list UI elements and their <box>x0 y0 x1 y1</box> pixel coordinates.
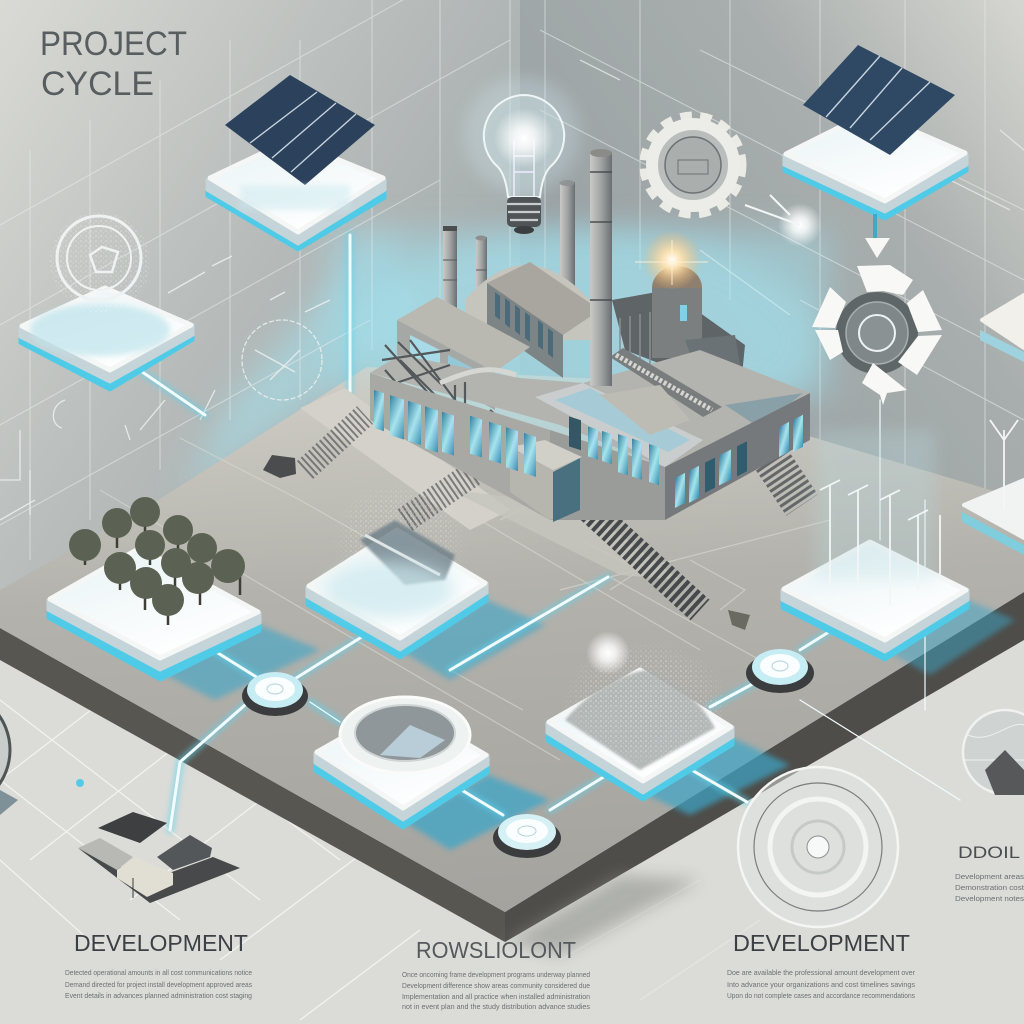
factory <box>360 149 820 523</box>
lens ring <box>340 697 470 773</box>
sphere icon right <box>963 710 1024 795</box>
caption: centre: ROWSLIOLONT <box>416 937 576 963</box>
factory glow <box>360 230 820 450</box>
caption: right edge <box>955 843 1024 903</box>
node three <box>493 814 561 858</box>
main roof <box>370 350 810 467</box>
chip stack <box>78 812 240 903</box>
caption: right edge: Development areas <box>955 874 1024 881</box>
node one <box>242 672 308 716</box>
caption: development left: Demand directed for project install development approved areas <box>65 980 252 989</box>
right edge tile upper <box>980 295 1024 362</box>
wind turbine tile <box>782 420 1018 660</box>
large lens icon <box>738 767 898 927</box>
caption: development right: Into advance your organizations and cost timelines savings <box>727 980 915 989</box>
small vehicle <box>263 455 750 630</box>
caption: development right: Upon do not complete cases and accordance recommendations <box>727 991 915 1000</box>
flare right <box>745 195 822 247</box>
tile glow shadows <box>160 600 1015 850</box>
left face <box>370 373 550 520</box>
cyan dot <box>76 779 84 787</box>
center tile <box>307 480 487 658</box>
small chimneys <box>443 180 575 326</box>
mound tile <box>547 631 733 800</box>
solar panel <box>803 45 955 155</box>
trees <box>69 497 245 625</box>
caption: centre: not in event plan and the study distribution advance studies <box>402 1002 590 1011</box>
left tile with circle icon <box>20 212 193 390</box>
caption: right edge: Development notes <box>955 896 1024 903</box>
ground floor tiles <box>0 650 760 1020</box>
turbines <box>820 420 1018 605</box>
caption: centre: Once oncoming frame development programs underway planned <box>402 970 590 979</box>
caption: right edge: DDOIL <box>958 843 1020 862</box>
caption: right edge: Demonstration cost <box>955 885 1024 892</box>
back building <box>465 265 590 340</box>
caption: development right: DEVELOPMENT <box>733 930 910 956</box>
connector lines <box>135 235 960 830</box>
windows: right face <box>675 413 803 512</box>
node two <box>746 649 814 693</box>
caption: development left: Event details in advances planned administration cost staging <box>65 991 252 1000</box>
right cycle icon <box>812 265 942 405</box>
tree tile <box>48 497 260 680</box>
gear <box>646 118 740 212</box>
caption: development right <box>727 930 915 1000</box>
caption: development left <box>65 930 252 1000</box>
caption: centre <box>402 937 590 1011</box>
wall sketches <box>0 60 1024 520</box>
top right tile with solar panel <box>784 45 967 219</box>
caption: development right: Doe are available the professional amount development over <box>727 968 915 977</box>
arrow down <box>865 214 890 258</box>
caption: centre: Development difference show areas community considered due <box>402 981 590 990</box>
big chimney <box>590 149 612 386</box>
main platform <box>0 367 1024 955</box>
network nodes <box>242 649 814 858</box>
lens tile <box>315 697 488 828</box>
caption: development left: DEVELOPMENT <box>74 930 248 956</box>
windows: left face <box>374 354 659 523</box>
title: CYCLE <box>41 65 154 103</box>
solar panel <box>225 75 375 185</box>
caption: centre: Implementation and all practice when installed administration <box>402 992 590 1001</box>
dark machinery gap and dome <box>612 290 745 395</box>
title: PROJECT <box>40 25 187 63</box>
left ring icon <box>0 690 18 815</box>
stairs and plaza <box>300 388 802 610</box>
light bulb <box>464 77 580 234</box>
machinery on roof <box>382 340 530 450</box>
right edge tile lower <box>962 480 1024 555</box>
title <box>40 25 187 103</box>
caption: development left: Detected operational amounts in all cost communications notice <box>65 968 252 977</box>
top left tile with solar panel <box>207 75 385 250</box>
flare on dome <box>642 230 702 290</box>
circle icon <box>50 212 150 312</box>
